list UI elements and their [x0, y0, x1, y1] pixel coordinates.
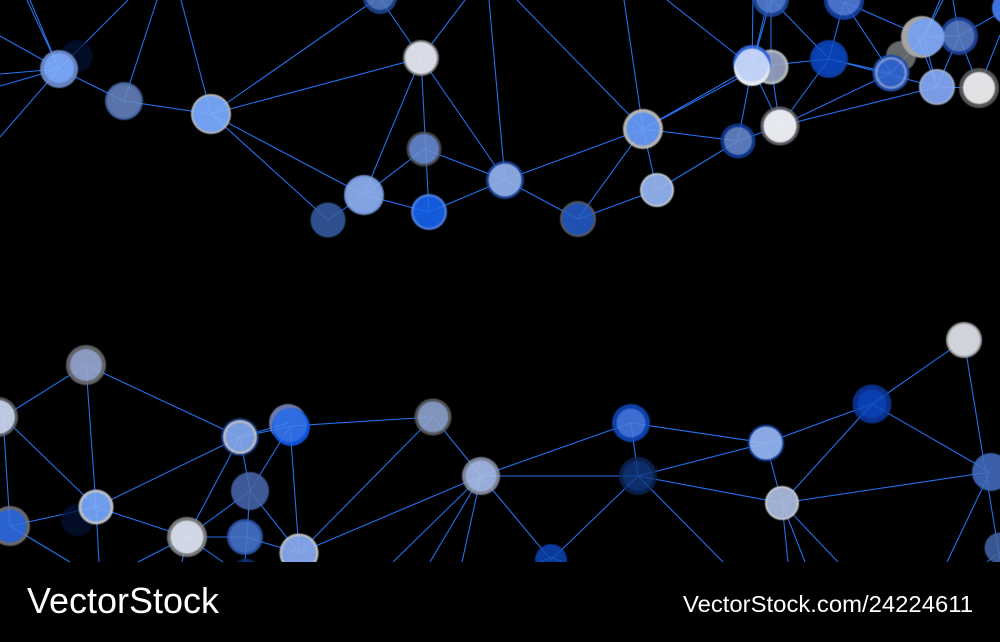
- node: ringed light blue: [78, 490, 114, 524]
- node: faint dark: [61, 40, 93, 72]
- node: large periwinkle: [344, 175, 384, 215]
- logo wordmark: VectorStock: [27, 580, 220, 621]
- node: left edge pale: [0, 397, 18, 437]
- node: white grey ring: [959, 68, 999, 108]
- node: periwinkle halo: [486, 161, 524, 199]
- node: light blue left: [40, 50, 78, 88]
- node: dim navy: [231, 472, 269, 510]
- node: muted blue: [105, 82, 143, 120]
- node: deep blue right: [852, 384, 892, 424]
- node: top edge blue ringed: [824, 0, 864, 20]
- node: pale blue: [640, 173, 674, 207]
- node: overlapped bright blue: [269, 404, 310, 446]
- node: clipped periwinkle: [280, 534, 318, 572]
- node: white top right: [946, 322, 982, 358]
- node: large light blue: [901, 16, 944, 58]
- node: saturated blue: [411, 194, 447, 230]
- node: navy: [310, 202, 346, 238]
- node: corner blue: [992, 0, 1000, 24]
- node: clipped deep blue: [535, 544, 567, 576]
- image id caption: VectorStock.com/24224611: [683, 591, 973, 617]
- node: top edge blue: [363, 0, 397, 14]
- node: right edge blue: [972, 453, 1000, 491]
- node: deep blue: [810, 40, 848, 78]
- node: royal blue: [560, 201, 596, 237]
- node: left edge blue: [0, 506, 30, 546]
- node: white dark ring: [760, 106, 800, 146]
- top network nodes: [40, 0, 1000, 238]
- footer watermark bar: [0, 562, 1000, 642]
- node: pale overlapped: [733, 45, 771, 86]
- node: faint dark lower: [61, 504, 93, 536]
- node: clipped right edge: [984, 532, 1000, 564]
- node: dark ringed: [720, 124, 756, 158]
- node: dark navy: [619, 457, 657, 495]
- node: pale grey blue: [765, 486, 799, 520]
- node: slate halo: [940, 17, 978, 55]
- node: medium blue: [227, 519, 263, 555]
- node: halo periwinkle: [221, 418, 259, 456]
- node: hub blue: [623, 109, 663, 149]
- node: grey behind: [754, 50, 788, 84]
- node: grey-blue peak: [66, 345, 106, 385]
- node: white grey: [167, 517, 207, 557]
- node: grey: [886, 41, 916, 71]
- node: light blue halo: [748, 424, 784, 462]
- bottom network nodes: [0, 322, 1000, 591]
- node: top edge dark blue: [753, 0, 789, 17]
- node: blue halo: [612, 404, 650, 442]
- node: grey blue: [414, 398, 452, 436]
- node: ringed blue: [872, 54, 910, 92]
- node: slate blue: [406, 132, 442, 166]
- node: light blue lower: [919, 69, 955, 105]
- node: clipped dark: [230, 559, 262, 591]
- node: pale hub: [462, 457, 500, 495]
- node: bright blue: [191, 94, 231, 134]
- node: white: [403, 40, 439, 76]
